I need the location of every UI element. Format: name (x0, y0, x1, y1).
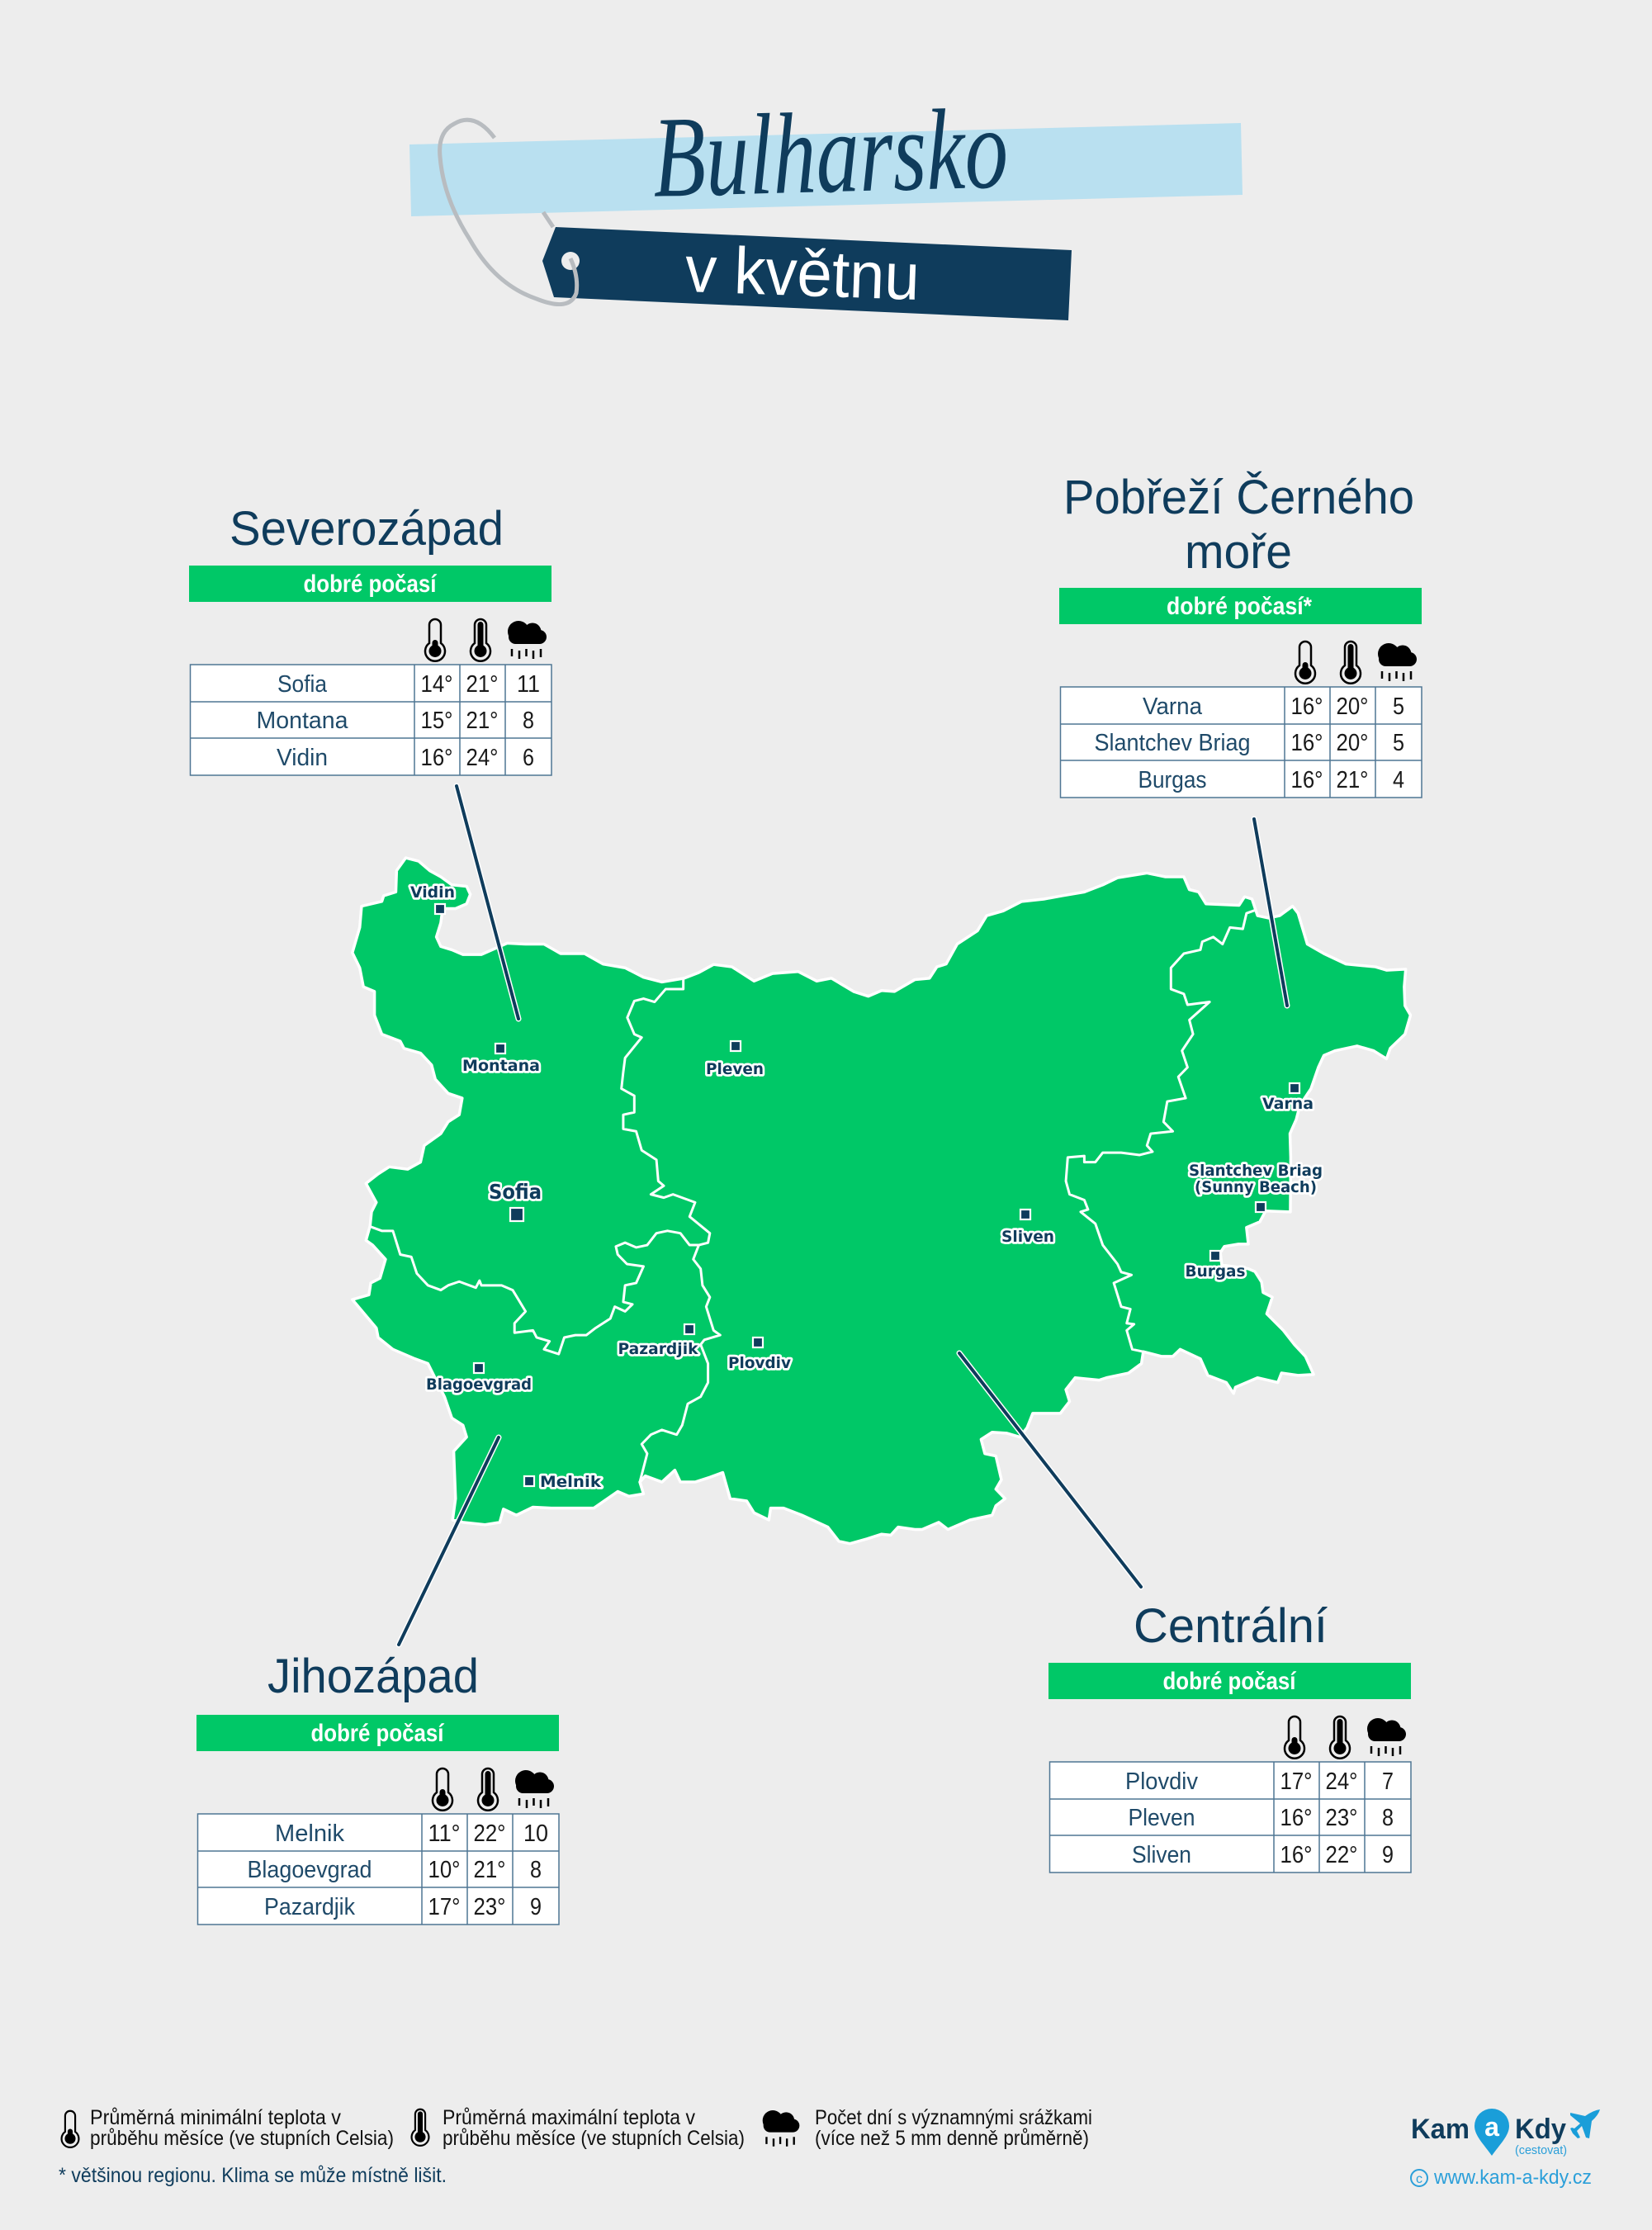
rating bar: dobré počasí (1162, 1668, 1297, 1695)
panel: Jihozápad (196, 1650, 559, 1925)
table (190, 665, 551, 775)
table (198, 1814, 559, 1925)
table: 22° (1326, 1842, 1357, 1868)
city: Pazardjik (618, 1324, 698, 1358)
rating bar: dobré počasí (304, 571, 438, 598)
map of Bulgaria with regions (353, 858, 1410, 1544)
tag string (440, 120, 577, 305)
table: Sliven (1132, 1842, 1191, 1868)
table: 21° (466, 708, 499, 734)
table: 7 (1382, 1768, 1394, 1795)
table: 16° (1280, 1805, 1313, 1831)
city: Sofia (489, 1180, 542, 1221)
table: 14° (421, 671, 452, 698)
table: 16° (1291, 694, 1323, 720)
copyright website: www.kam-a-kdy.cz (1433, 2166, 1592, 2189)
city: Montana: Montana (462, 1057, 540, 1075)
city: Plovdiv: Plovdiv (728, 1354, 792, 1372)
footnote: * většinou regionu. Klima se může místně lišit. (59, 2164, 447, 2187)
legend item: minimum temperature (62, 2106, 394, 2150)
city: Plovdiv (728, 1338, 792, 1372)
icons (433, 1768, 554, 1811)
subtitle: v květnu: v květnu (684, 232, 921, 314)
city: Blagoevgrad: Blagoevgrad (426, 1375, 532, 1394)
city: Burgas: Burgas (1186, 1262, 1245, 1281)
table: 6 (523, 745, 534, 771)
table (1060, 687, 1422, 798)
table: 23° (474, 1894, 505, 1920)
table: Pazardjik (264, 1894, 355, 1920)
rating bar (1048, 1663, 1411, 1699)
table: Montana (256, 708, 348, 734)
heading: Pobřeží Černého moře: moře (1185, 525, 1292, 579)
table: 17° (428, 1894, 461, 1920)
logo wordmark right: Kdy (1515, 2114, 1566, 2145)
table: 4 (1393, 767, 1404, 793)
icon: plane (1570, 2109, 1600, 2138)
legend item: rainy days: (více než 5 mm denně průměrně) (815, 2127, 1089, 2150)
table: 16° (421, 745, 452, 771)
legend (59, 2106, 1092, 2187)
icon: map pin: a (1484, 2112, 1499, 2142)
table: 24° (1326, 1768, 1357, 1795)
country outline (353, 858, 1410, 1544)
city: Sliven (1001, 1210, 1054, 1246)
table: 22° (474, 1820, 505, 1847)
legend item: rainy days: Počet dní s významnými srážkami (815, 2106, 1092, 2129)
panel: Severozápad (189, 502, 551, 775)
rating bar: dobré počasí* (1167, 593, 1312, 620)
city: Vidin (410, 883, 455, 914)
title ribbon (409, 123, 1243, 216)
rating bar: dobré počasí (310, 1720, 445, 1747)
city: Varna: Varna (1262, 1095, 1314, 1113)
title: Bulharsko: Bulharsko (651, 84, 1010, 222)
table: 5 (1393, 694, 1404, 720)
city: Blagoevgrad (426, 1363, 532, 1394)
table (1050, 1762, 1411, 1873)
logo wordmark left: Kam (1411, 2114, 1470, 2145)
panel: Pobřeží Černého moře (1059, 471, 1422, 798)
region borders (369, 910, 1256, 1482)
table: 10° (428, 1857, 461, 1883)
table: 9 (1382, 1842, 1394, 1868)
legend item: maximum temperature (412, 2106, 745, 2150)
legend item: minimum temperature: průběhu měsíce (ve stupních Celsia) (90, 2127, 394, 2150)
table: 16° (1280, 1842, 1313, 1868)
table: 16° (1291, 730, 1323, 756)
city: Sliven: Sliven (1001, 1228, 1054, 1246)
heading: Centrální: Centrální (1134, 1599, 1328, 1653)
table: 9 (530, 1894, 542, 1920)
table: 11° (428, 1820, 461, 1847)
heading: Severozápad: Severozápad (230, 502, 504, 556)
logo tagline: (cestovat) (1515, 2143, 1567, 2157)
table: 20° (1336, 730, 1369, 756)
table: 11 (517, 671, 540, 698)
table: 16° (1291, 767, 1323, 793)
leader lines (399, 786, 1287, 1645)
heading: Jihozápad: Jihozápad (267, 1650, 479, 1703)
city: Varna (1262, 1083, 1314, 1113)
title block (409, 84, 1243, 320)
city: Pleven (706, 1041, 764, 1078)
table: 17° (1280, 1768, 1313, 1795)
legend item: rainy days (763, 2106, 1092, 2150)
rating bar (1059, 588, 1422, 624)
table: Plovdiv (1125, 1768, 1198, 1795)
table: Slantchev Briag (1095, 730, 1250, 756)
city: Burgas (1186, 1251, 1245, 1281)
table: Sofia (277, 671, 328, 698)
table: 24° (466, 745, 499, 771)
panel: Centrální (1048, 1599, 1411, 1873)
table: 15° (421, 708, 452, 734)
icons (1295, 642, 1417, 684)
table: Pleven (1128, 1805, 1195, 1831)
city: Melnik: Melnik (540, 1473, 601, 1491)
city: Sofia: Sofia (489, 1180, 542, 1204)
table: 8 (530, 1857, 542, 1883)
table: 21° (1336, 767, 1369, 793)
city: Slantchev Briag: (Sunny Beach) (1195, 1178, 1317, 1196)
heading: Pobřeží Černého moře: Pobřeží Černého (1063, 471, 1414, 524)
table: 5 (1393, 730, 1404, 756)
table: 8 (523, 708, 534, 734)
city: Montana (462, 1044, 540, 1075)
table: Vidin (277, 745, 328, 771)
table: 20° (1336, 694, 1369, 720)
table: Varna (1143, 694, 1203, 720)
price tag (542, 227, 1072, 320)
table: 23° (1326, 1805, 1357, 1831)
legend item: maximum temperature: Průměrná maximální teplota v (443, 2106, 695, 2129)
legend item: minimum temperature: Průměrná minimální teplota v (90, 2106, 341, 2129)
city: Slantchev Briag: Slantchev Briag (1189, 1162, 1323, 1180)
legend item: maximum temperature: průběhu měsíce (ve stupních Celsia) (443, 2127, 745, 2150)
tag hole (561, 252, 580, 270)
table: 21° (466, 671, 499, 698)
city: Pleven: Pleven (706, 1060, 764, 1078)
logo: Kam a Kdy (1411, 2109, 1600, 2189)
table: Blagoevgrad (248, 1857, 372, 1883)
table: 10 (523, 1820, 548, 1847)
heading: Pobřeží Černého moře (1063, 471, 1414, 579)
icon: map pin (1474, 2109, 1509, 2156)
table: 21° (474, 1857, 505, 1883)
rating bar (196, 1715, 559, 1751)
icons (425, 619, 547, 661)
city: Vidin: Vidin (410, 883, 455, 902)
city: Pazardjik: Pazardjik (618, 1340, 698, 1358)
city markers and labels (410, 883, 1323, 1491)
table: Burgas (1138, 767, 1207, 793)
rating bar (189, 566, 551, 602)
copyright website: c (1416, 2172, 1422, 2186)
table: 8 (1382, 1805, 1394, 1831)
table: Melnik (275, 1820, 344, 1847)
city: Slantchev Briag (1189, 1162, 1323, 1212)
icons (1285, 1716, 1406, 1759)
